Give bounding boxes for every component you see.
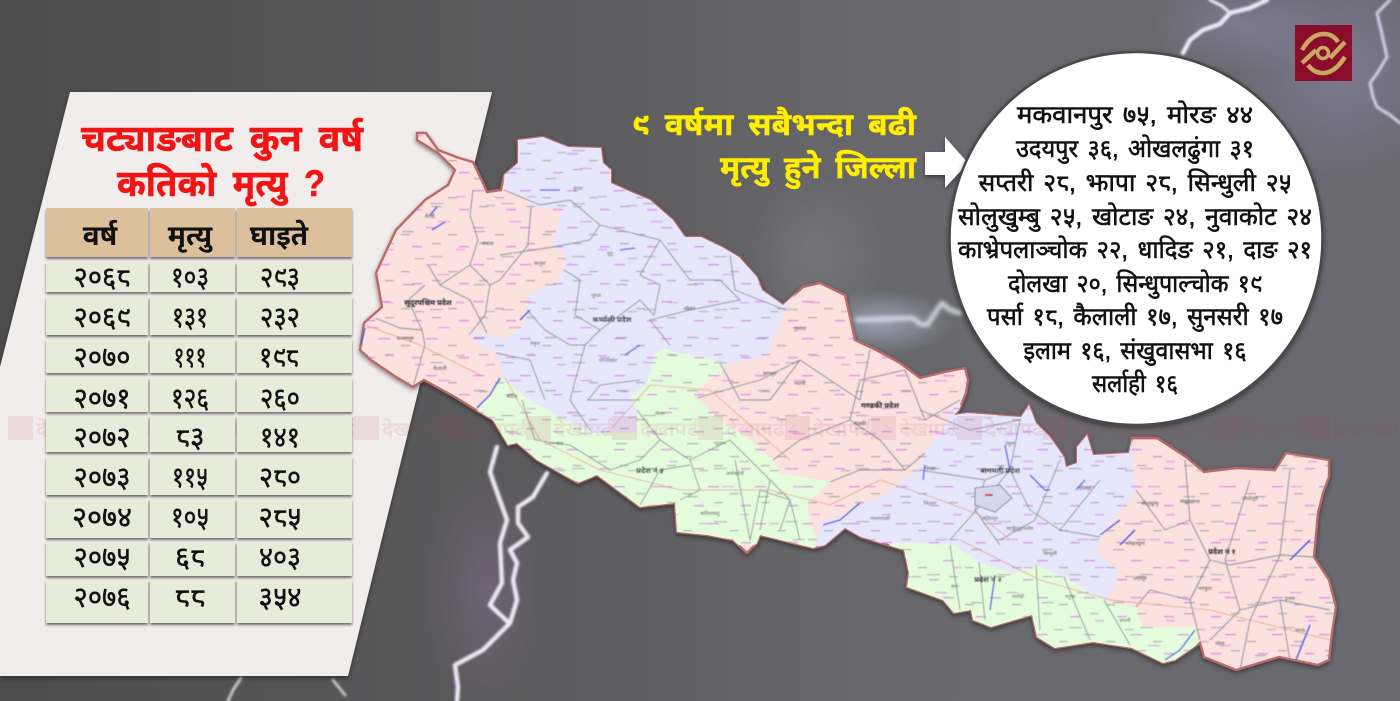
province labels — [404, 298, 1236, 584]
table rows: १०३ — [171, 262, 209, 294]
province labels: कर्णाली प्रदेश — [593, 315, 632, 324]
watermark band: देखापढी — [382, 417, 448, 441]
table rows: ११५ — [172, 462, 208, 494]
watermark band: देखापढी — [985, 417, 1051, 441]
district labels: बर्दिया — [506, 393, 518, 400]
table rows: २०७६ — [74, 582, 130, 614]
table rows: ८३ — [176, 422, 204, 454]
district labels: म्याग्दी — [794, 381, 806, 387]
table rows: २८५ — [258, 502, 302, 534]
table: deaths and injuries by year — [46, 208, 352, 623]
district labels: ललितपुर — [982, 516, 999, 522]
district labels: बाजुरा — [534, 261, 546, 267]
district labels: अर्घाखाँची — [726, 470, 745, 477]
circle: districts with most deaths — [950, 52, 1322, 425]
district labels: दोलखा — [1079, 486, 1092, 492]
lightning bolt behind map, middle — [857, 303, 960, 325]
district labels: धनकुटा — [1198, 586, 1212, 592]
table rows: २६० — [260, 383, 300, 415]
map texture: place-name marks — [350, 125, 1350, 675]
district labels: संखुवासभा — [1180, 499, 1201, 505]
watermark band — [8, 416, 1399, 441]
table rows: १३१ — [172, 302, 208, 334]
circle: districts with most deaths: काभ्रेपलाञ्चोक २२, धादिङ २१, दाङ २१ — [958, 234, 1312, 264]
table rows: १२६ — [171, 383, 209, 415]
district labels: डोल्पा — [684, 306, 696, 312]
kathmandu valley — [975, 485, 1012, 512]
watermark band: देखापढी — [640, 417, 706, 441]
watermark band: देखापढी — [468, 417, 534, 441]
watermark band: देखापढी — [726, 417, 792, 441]
watermark band: देखापढी — [1071, 417, 1137, 441]
district labels: जाजरकोट — [599, 358, 618, 364]
circle: districts with most deaths: सर्लाही १६ — [1092, 369, 1178, 398]
yellow heading: मृत्यु हुने जिल्ला — [720, 150, 917, 189]
district labels: रोल्पा — [655, 411, 666, 417]
province labels: गण्डकी प्रदेश — [861, 401, 899, 410]
table rows: १४१ — [260, 422, 300, 454]
district labels: बैतडी — [425, 213, 436, 220]
map region: Bagmati province — [815, 400, 1136, 600]
rivers and lakes — [361, 190, 1310, 660]
watermark band: देखापढी — [36, 417, 102, 441]
district labels: मुस्ताङ — [794, 326, 807, 332]
district labels: नवलपरासी — [870, 516, 891, 522]
district boundaries — [375, 190, 1330, 670]
district labels: गोरखा — [924, 466, 936, 472]
district labels: बझाङ — [482, 241, 495, 247]
district labels: मुगु — [607, 251, 614, 257]
panel title: चट्याङबाट कुन वर्ष — [81, 117, 364, 161]
watermark band: देखापढी — [122, 417, 188, 441]
district labels: रसुवा — [1005, 441, 1015, 447]
district labels: ताप्लेजुङ — [1242, 495, 1259, 502]
arrow pointing to circle — [925, 137, 968, 188]
district labels: हुम्ला — [574, 186, 583, 192]
district labels: बारा — [951, 584, 959, 590]
table rows: २३२ — [260, 302, 300, 334]
circle: districts with most deaths: इलाम १६, संखुवासभा १६ — [1024, 337, 1246, 366]
panel title — [81, 117, 364, 206]
map region: Lumbini province — [470, 348, 830, 560]
logo — [1295, 25, 1352, 81]
circle: districts with most deaths: सप्तरी २८, झापा २८, सिन्धुली २५ — [978, 168, 1292, 198]
district labels: कास्की — [854, 420, 867, 427]
map of Nepal — [360, 133, 1336, 670]
district labels: प्युठान — [714, 441, 726, 447]
left panel background — [0, 92, 492, 676]
table rows: २०७५ — [74, 542, 130, 574]
table rows: ६८ — [175, 542, 205, 574]
table rows: ८८ — [174, 582, 206, 614]
district labels: मोरङ — [1215, 641, 1226, 647]
table rows: २०६९ — [74, 302, 130, 334]
table rows: १११ — [174, 342, 206, 374]
district labels: सर्लाही — [1012, 593, 1025, 600]
province labels: सुदूरपश्चिम प्रदेश — [404, 298, 452, 308]
panel title: कतिको मृत्यु ? — [117, 163, 325, 206]
table rows: ३५४ — [258, 582, 302, 614]
district labels: जुम्ला — [591, 293, 602, 299]
table rows: १०५ — [171, 502, 209, 534]
district labels: उदयपुर — [1133, 576, 1148, 582]
table header: घाइते — [250, 218, 309, 251]
table rows: २०७२ — [74, 422, 130, 454]
yellow heading: ९ वर्षमा सबैभन्दा बढी — [632, 107, 917, 142]
province labels: प्रदेश नं १ — [1208, 546, 1236, 556]
yellow heading — [632, 107, 917, 189]
watermark band: देखापढी — [1160, 417, 1226, 441]
province labels: प्रदेश नं २ — [974, 574, 1002, 584]
table rows: २९३ — [260, 262, 300, 294]
district labels — [396, 186, 1306, 647]
watermark band: देखापढी — [554, 417, 620, 441]
district labels: चितवन — [924, 501, 937, 507]
district labels: काभ्रेपलाञ्चोक — [1007, 525, 1034, 532]
province labels: बागमती प्रदेश — [980, 466, 1020, 475]
watermark band: देखापढी — [813, 417, 879, 441]
table header — [46, 208, 352, 257]
circle: districts with most deaths: सोलुखुम्बु २५, खोटाङ २४, नुवाकोट २४ — [958, 202, 1312, 232]
district labels: सोलुखुम्बु — [1142, 501, 1159, 507]
circle: districts with most deaths: उदयपुर ३६, ओखलढुंगा ३१ — [1016, 134, 1254, 164]
district labels: रुकुम — [530, 341, 541, 347]
district labels: बागलुङ — [763, 371, 778, 377]
circle: districts with most deaths: पर्सा १८, कैलाली १७, सुनसरी १७ — [987, 301, 1283, 332]
district labels: धनुषा — [1065, 594, 1076, 600]
district labels: ओखलढुंगा — [1125, 541, 1145, 547]
watermark band: देखापढी — [209, 417, 275, 441]
province labels: प्रदेश नं ५ — [636, 465, 664, 475]
district labels: कपिलवस्तु — [701, 511, 720, 517]
table rows: २८० — [259, 462, 301, 494]
table rows: २०६८ — [74, 262, 130, 294]
highway and road lines — [365, 325, 1330, 640]
table rows: २०७३ — [74, 462, 130, 494]
table header: वर्ष — [83, 219, 119, 251]
table rows: २०७४ — [72, 502, 132, 534]
district labels: झापा — [1295, 628, 1306, 634]
circle: districts with most deaths: दोलखा २०, सिन्धुपाल्चोक १९ — [1008, 269, 1262, 299]
circle: districts with most deaths: मकवानपुर ७५, मोरङ ४४ — [1017, 100, 1253, 130]
district labels: कैलाली — [433, 365, 447, 372]
district labels: सिन्धुली — [1043, 551, 1058, 557]
table rows: २०७१ — [74, 383, 130, 415]
map region: Province 2 — [889, 543, 1198, 670]
district labels: सप्तरी — [1119, 618, 1131, 624]
watermark band: देखापढी — [295, 417, 361, 441]
watermark band: देखापढी — [1246, 417, 1312, 441]
map region: Karnali province — [469, 120, 810, 433]
district labels: कञ्चनपुर — [396, 336, 415, 342]
district labels: इलाम — [1285, 596, 1296, 602]
table rows: १९८ — [259, 342, 299, 374]
watermark band: देखापढी — [1333, 417, 1399, 441]
table header: मृत्यु — [168, 220, 213, 253]
table rows: २०७० — [74, 342, 130, 374]
watermark band: देखापढी — [899, 417, 965, 441]
district labels: दाङ — [556, 441, 564, 447]
table rows: ४०३ — [259, 542, 301, 574]
table rows — [46, 262, 352, 623]
